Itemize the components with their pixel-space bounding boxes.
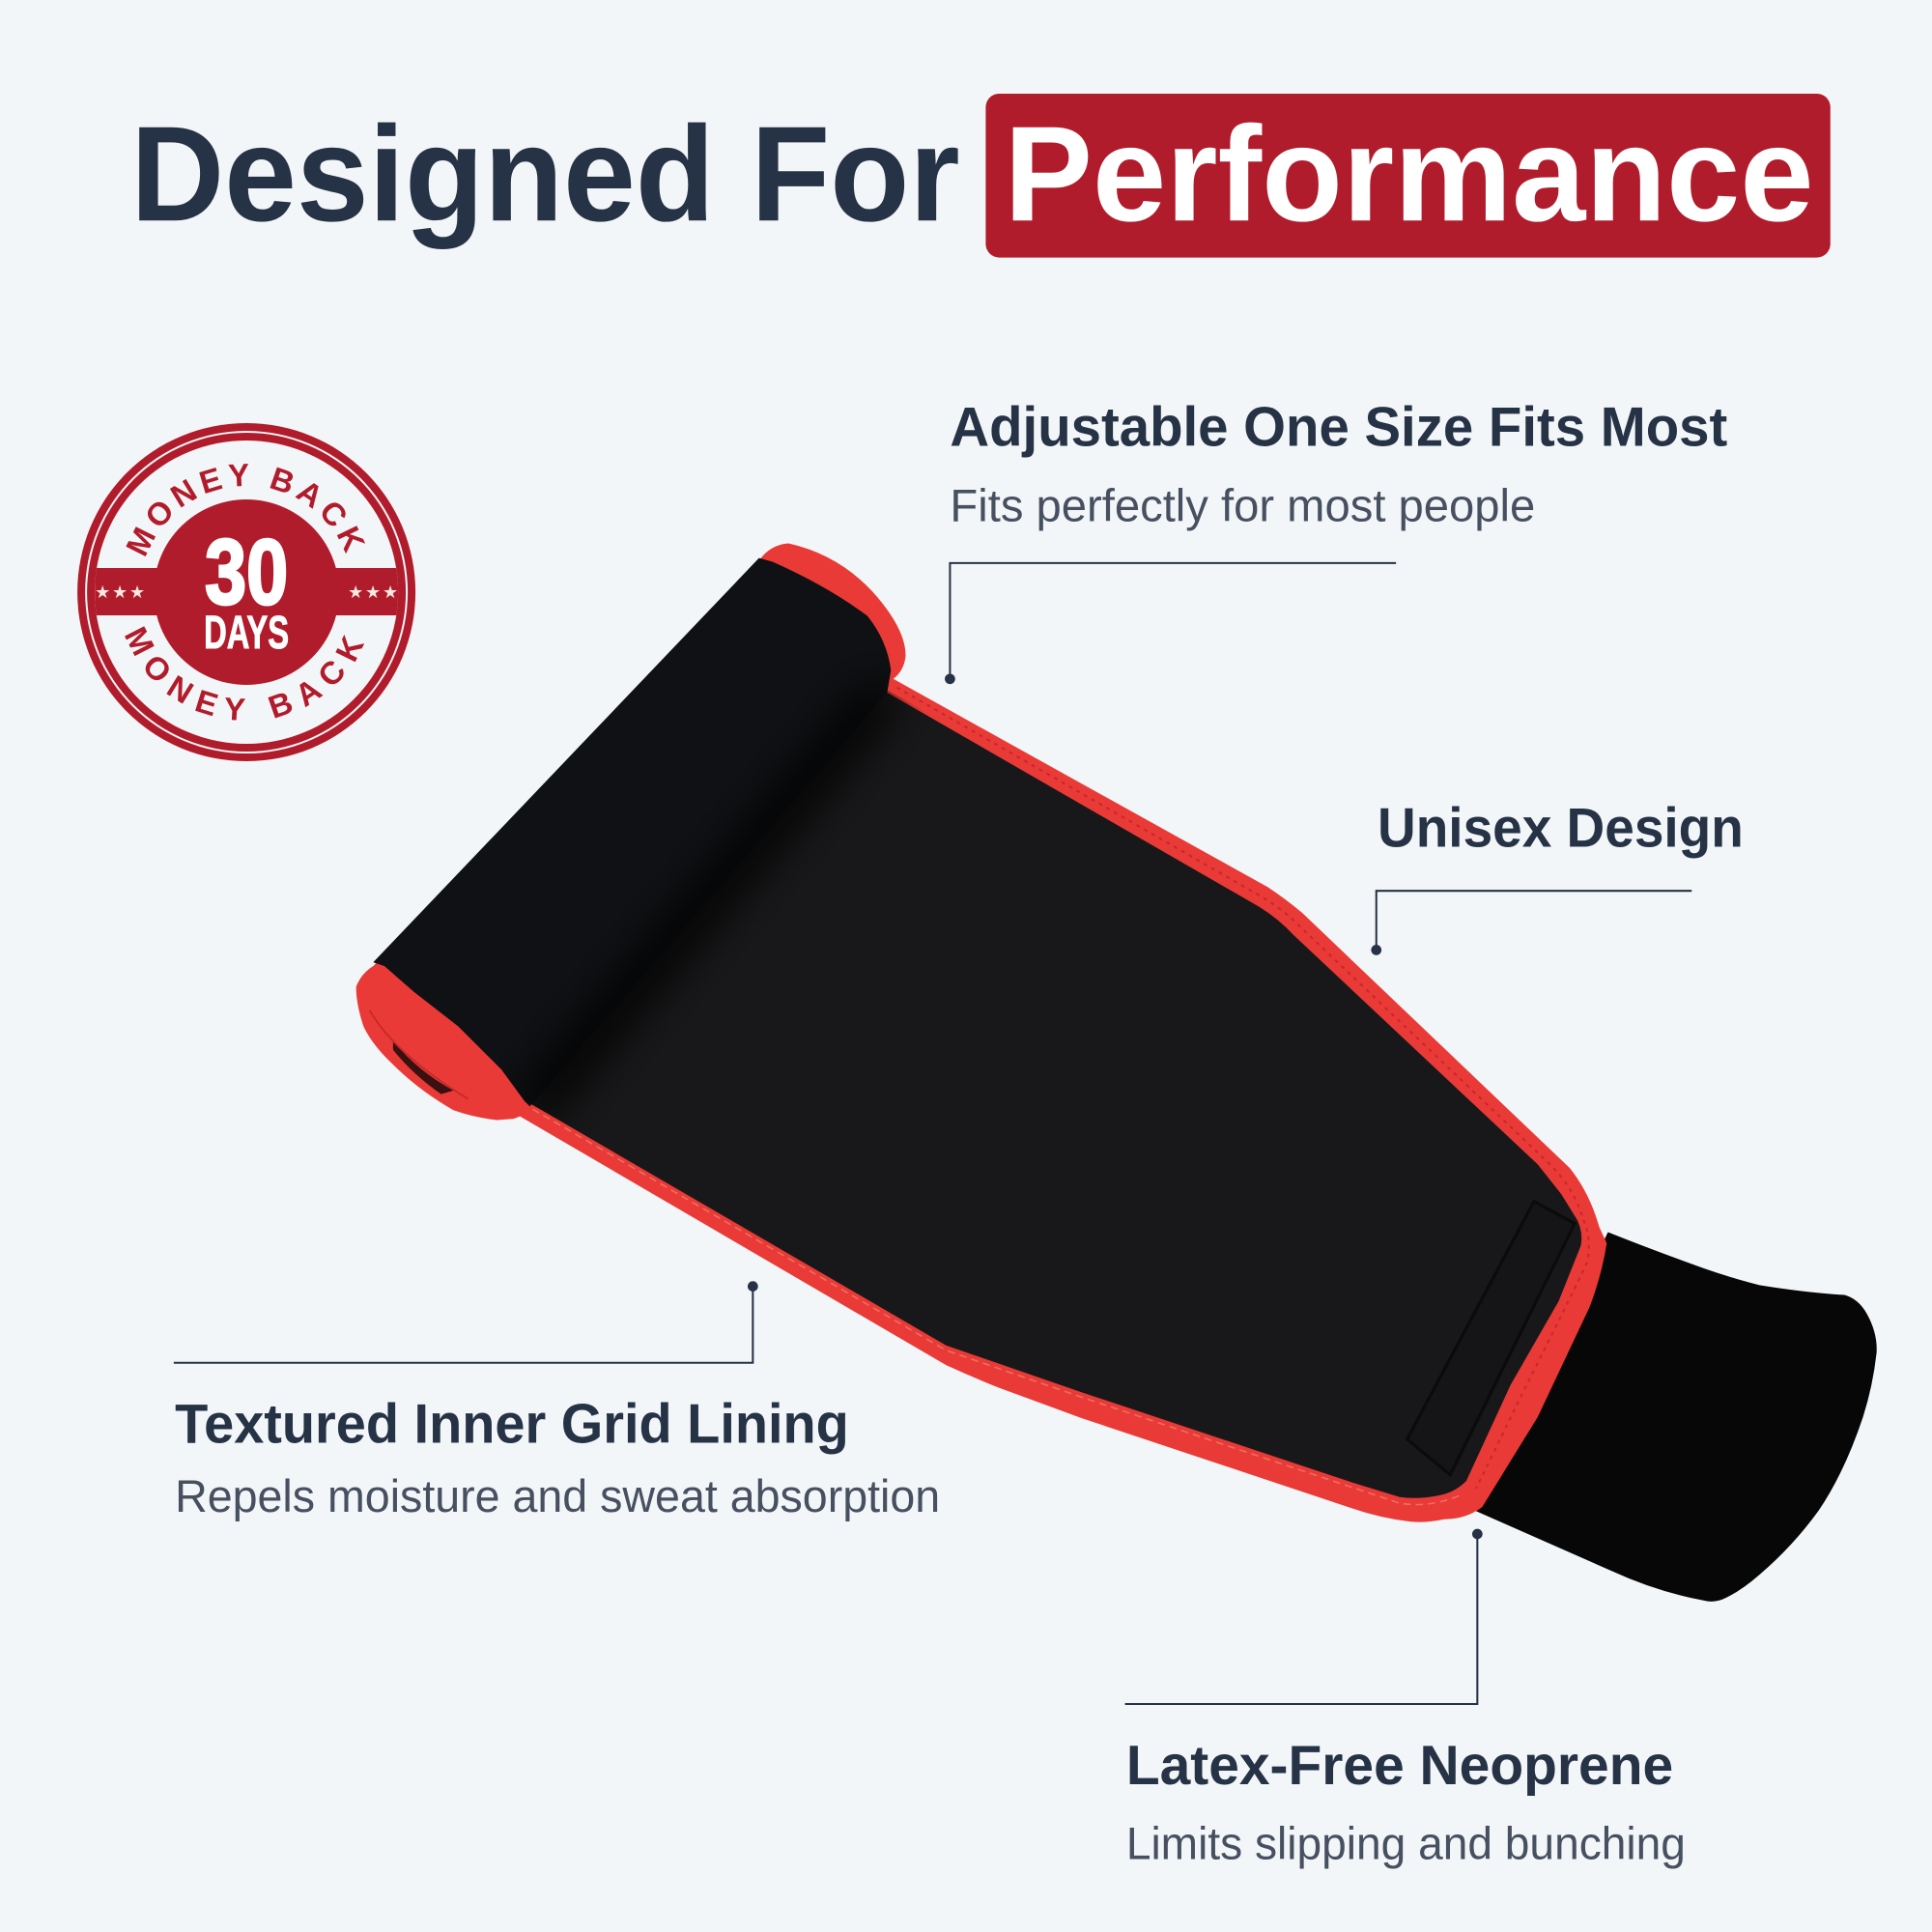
belt red binding <box>356 543 1606 1522</box>
inner patch pocket <box>1407 1202 1575 1475</box>
description: Limits slipping and bunching <box>1126 1819 1686 1870</box>
leader line <box>1377 891 1691 950</box>
heading: Latex-Free Neoprene <box>1126 1735 1673 1797</box>
leader line <box>950 563 1396 679</box>
leader dot <box>1472 1529 1483 1539</box>
callout: adjustable one size fits most <box>945 397 1727 684</box>
binding stitching: upper edge <box>897 688 1589 1489</box>
roll shadow <box>529 690 887 1112</box>
roll end opening <box>393 1041 453 1094</box>
title text: Performance: Performance <box>1005 98 1814 249</box>
badge ring gap <box>85 431 408 753</box>
badge text: 30: 30 <box>205 521 288 624</box>
badge text: days: DAYS <box>204 608 289 659</box>
badge centre disc <box>154 499 339 685</box>
title highlight box <box>985 94 1831 258</box>
title <box>130 94 1831 258</box>
badge: 30 days money back <box>77 423 415 761</box>
badge text: money back bottom: MONEY BACK <box>125 626 365 721</box>
heading: Adjustable One Size Fits Most <box>950 397 1727 459</box>
heading: Textured Inner Grid Lining <box>175 1394 849 1456</box>
callout: unisex design <box>1371 797 1744 955</box>
binding stitching: lower edge <box>532 1109 1459 1505</box>
description: Fits perfectly for most people <box>950 481 1535 532</box>
badge inner ring <box>87 433 406 752</box>
leader dot <box>945 673 955 684</box>
badge face <box>95 440 398 744</box>
badge outer ring <box>77 423 415 761</box>
badge band <box>95 568 398 615</box>
callout: latex-free neoprene <box>1125 1529 1686 1870</box>
roll end fold line <box>370 1010 469 1099</box>
leader line <box>1125 1534 1477 1704</box>
badge stars right: ★★★ <box>348 582 398 603</box>
badge stars left: ★★★ <box>95 582 145 603</box>
badge text: money back top: MONEY BACK <box>126 464 365 556</box>
leader line <box>174 1287 753 1363</box>
rolled end of belt <box>373 558 891 1106</box>
product: waist trimmer belt <box>356 543 1877 1602</box>
leader dot <box>1371 945 1381 955</box>
belt black body <box>373 558 1581 1498</box>
heading: Unisex Design <box>1378 797 1744 859</box>
belt tail strap <box>1475 1233 1877 1602</box>
leader dot <box>748 1281 758 1292</box>
callout: textured inner grid lining <box>174 1281 940 1522</box>
title text: Designed For: Designed For <box>130 98 960 249</box>
description: Repels moisture and sweat absorption <box>175 1471 940 1522</box>
